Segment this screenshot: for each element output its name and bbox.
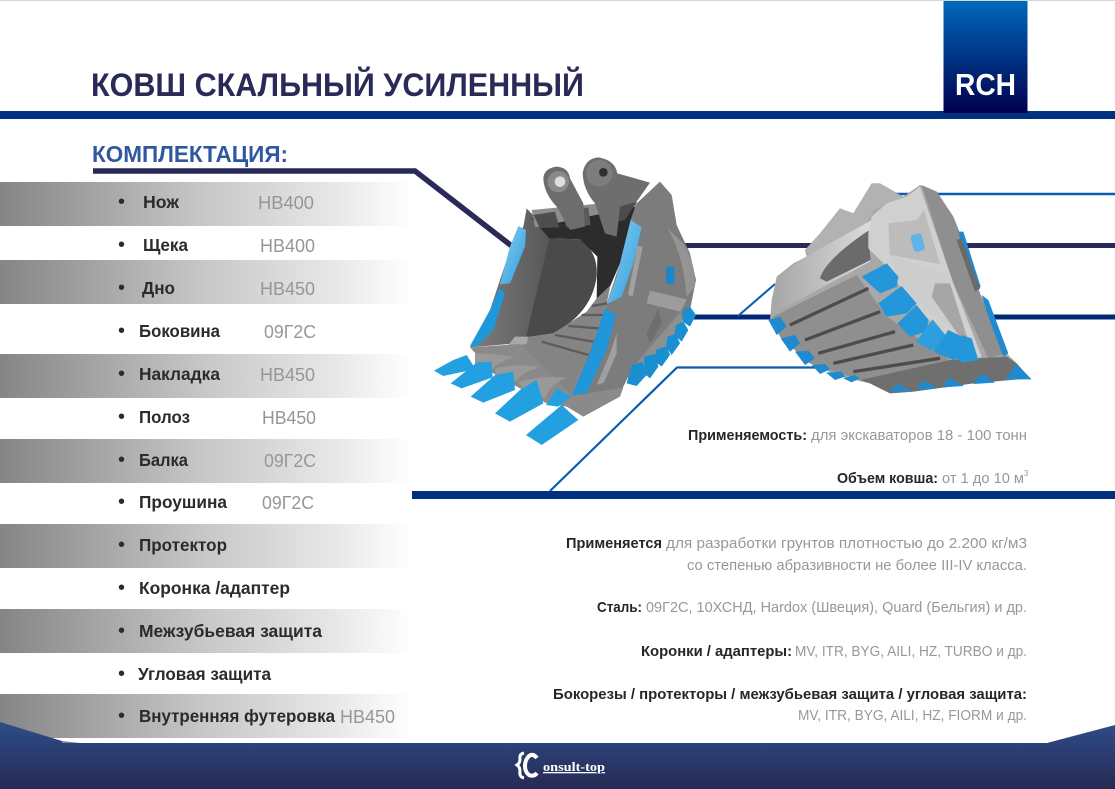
row: Коронка /адаптер: • bbox=[118, 577, 125, 599]
row: Накладка: Накладка bbox=[139, 364, 220, 384]
callout lines bbox=[93, 171, 1115, 491]
row: Коронка /адаптер: Коронка /адаптер bbox=[139, 578, 290, 598]
text: bucket volume: 3 bbox=[1024, 469, 1029, 478]
text: usage: Применяется bbox=[566, 535, 662, 552]
text: bucket volume: Объем ковша: bbox=[837, 470, 938, 487]
row: Балка: Балка bbox=[139, 450, 188, 470]
row: Нож: HB400 bbox=[258, 193, 314, 213]
row: Дно bbox=[0, 260, 412, 304]
row: Угловая защита: • bbox=[118, 663, 125, 685]
row: Внутренняя футеровка bbox=[0, 694, 412, 738]
text: applicability: для экскаваторов 18 - 100 тонн bbox=[811, 427, 1027, 444]
row: Проушина: 09Г2С bbox=[262, 493, 314, 513]
illustration: rock bucket front view bbox=[434, 157, 696, 445]
row: Полоз bbox=[118, 406, 316, 428]
text: usage: для разработки грунтов плотностью до 2.200 кг/м3 bbox=[666, 535, 1027, 552]
title: КОВШ СКАЛЬНЫЙ УСИЛЕННЫЙ bbox=[91, 67, 584, 103]
logo: consult-top: onsult-top bbox=[543, 759, 605, 774]
heading: equipment: КОМПЛЕКТАЦИЯ: bbox=[92, 141, 288, 167]
row: Щека bbox=[118, 234, 315, 256]
row: Дно: Дно bbox=[142, 278, 175, 298]
row: Межзубьевая защита bbox=[0, 609, 412, 653]
illustration: rock bucket rear view bbox=[768, 183, 1032, 393]
row: Боковина bbox=[118, 320, 316, 342]
row: Нож bbox=[0, 182, 412, 226]
text: applicability bbox=[688, 427, 1027, 444]
row: Нож: • bbox=[118, 191, 125, 213]
text: bucket volume: от 1 до 10 м bbox=[942, 470, 1024, 487]
row: Межзубьевая защита: • bbox=[118, 620, 125, 642]
row: Внутренняя футеровка: Внутренняя футеровка bbox=[139, 706, 335, 726]
row: Щека: HB400 bbox=[260, 236, 315, 256]
text: side cutters and protectors: MV, ITR, BYG, AILI, HZ, FIORM и др. bbox=[798, 707, 1027, 724]
row: Дно: HB450 bbox=[260, 279, 315, 299]
row: Боковина: Боковина bbox=[139, 321, 220, 341]
text: applicability: Применяемость: bbox=[688, 427, 807, 444]
row: Балка bbox=[0, 439, 412, 483]
panel: equipment list bbox=[0, 182, 412, 738]
header bar bbox=[0, 111, 1115, 119]
row: Протектор: Протектор bbox=[139, 535, 227, 555]
row: Боковина: 09Г2С bbox=[264, 322, 316, 342]
text: side cutters and protectors bbox=[553, 686, 1027, 724]
badge: RCH bbox=[944, 1, 1028, 113]
row: Щека: Щека bbox=[143, 235, 188, 255]
text: side cutters and protectors: Бокорезы / протекторы / межзубьевая защита / угловая защита: bbox=[553, 686, 1027, 703]
row: Накладка: HB450 bbox=[260, 365, 315, 385]
row: Накладка bbox=[0, 354, 412, 398]
row: Угловая защита: Угловая защита bbox=[138, 664, 271, 684]
footer band bbox=[0, 722, 1115, 789]
row: Нож: Нож bbox=[143, 192, 180, 212]
row: Дно: • bbox=[118, 277, 125, 299]
row: Полоз: • bbox=[118, 406, 125, 428]
badge: RCH: RCH bbox=[955, 67, 1016, 102]
row: Проушина bbox=[118, 491, 314, 513]
text: crowns and adapters: MV, ITR, BYG, AILI, HZ, TURBO и др. bbox=[795, 643, 1027, 660]
row: Протектор bbox=[0, 524, 412, 568]
divider bar bbox=[412, 491, 1115, 499]
text: steel: 09Г2С, 10ХСНД, Hardox (Швеция), Quard (Бельгия) и др. bbox=[646, 599, 1027, 616]
row: Внутренняя футеровка: • bbox=[118, 705, 125, 727]
row: Полоз: HB450 bbox=[262, 408, 316, 428]
row: Балка: 09Г2С bbox=[264, 451, 316, 471]
row: Межзубьевая защита: Межзубьевая защита bbox=[139, 621, 322, 641]
row: Полоз: Полоз bbox=[139, 407, 190, 427]
row: Боковина: • bbox=[118, 320, 125, 342]
logo: consult-top bbox=[517, 753, 605, 778]
row: Проушина: Проушина bbox=[139, 492, 227, 512]
text: usage: со степенью абразивности не более III-IV класса. bbox=[687, 557, 1027, 574]
text: usage bbox=[566, 535, 1027, 574]
text: crowns and adapters: Коронки / адаптеры: bbox=[641, 643, 792, 660]
row: Накладка: • bbox=[118, 363, 125, 385]
row: Проушина: • bbox=[118, 491, 125, 513]
row: Внутренняя футеровка: HB450 bbox=[340, 707, 395, 727]
text: bucket volume bbox=[837, 469, 1029, 487]
text: crowns and adapters bbox=[641, 643, 1027, 660]
row: Щека: • bbox=[118, 234, 125, 256]
row: Балка: • bbox=[118, 449, 125, 471]
text: steel: Сталь: bbox=[597, 599, 642, 616]
row: Протектор: • bbox=[118, 534, 125, 556]
